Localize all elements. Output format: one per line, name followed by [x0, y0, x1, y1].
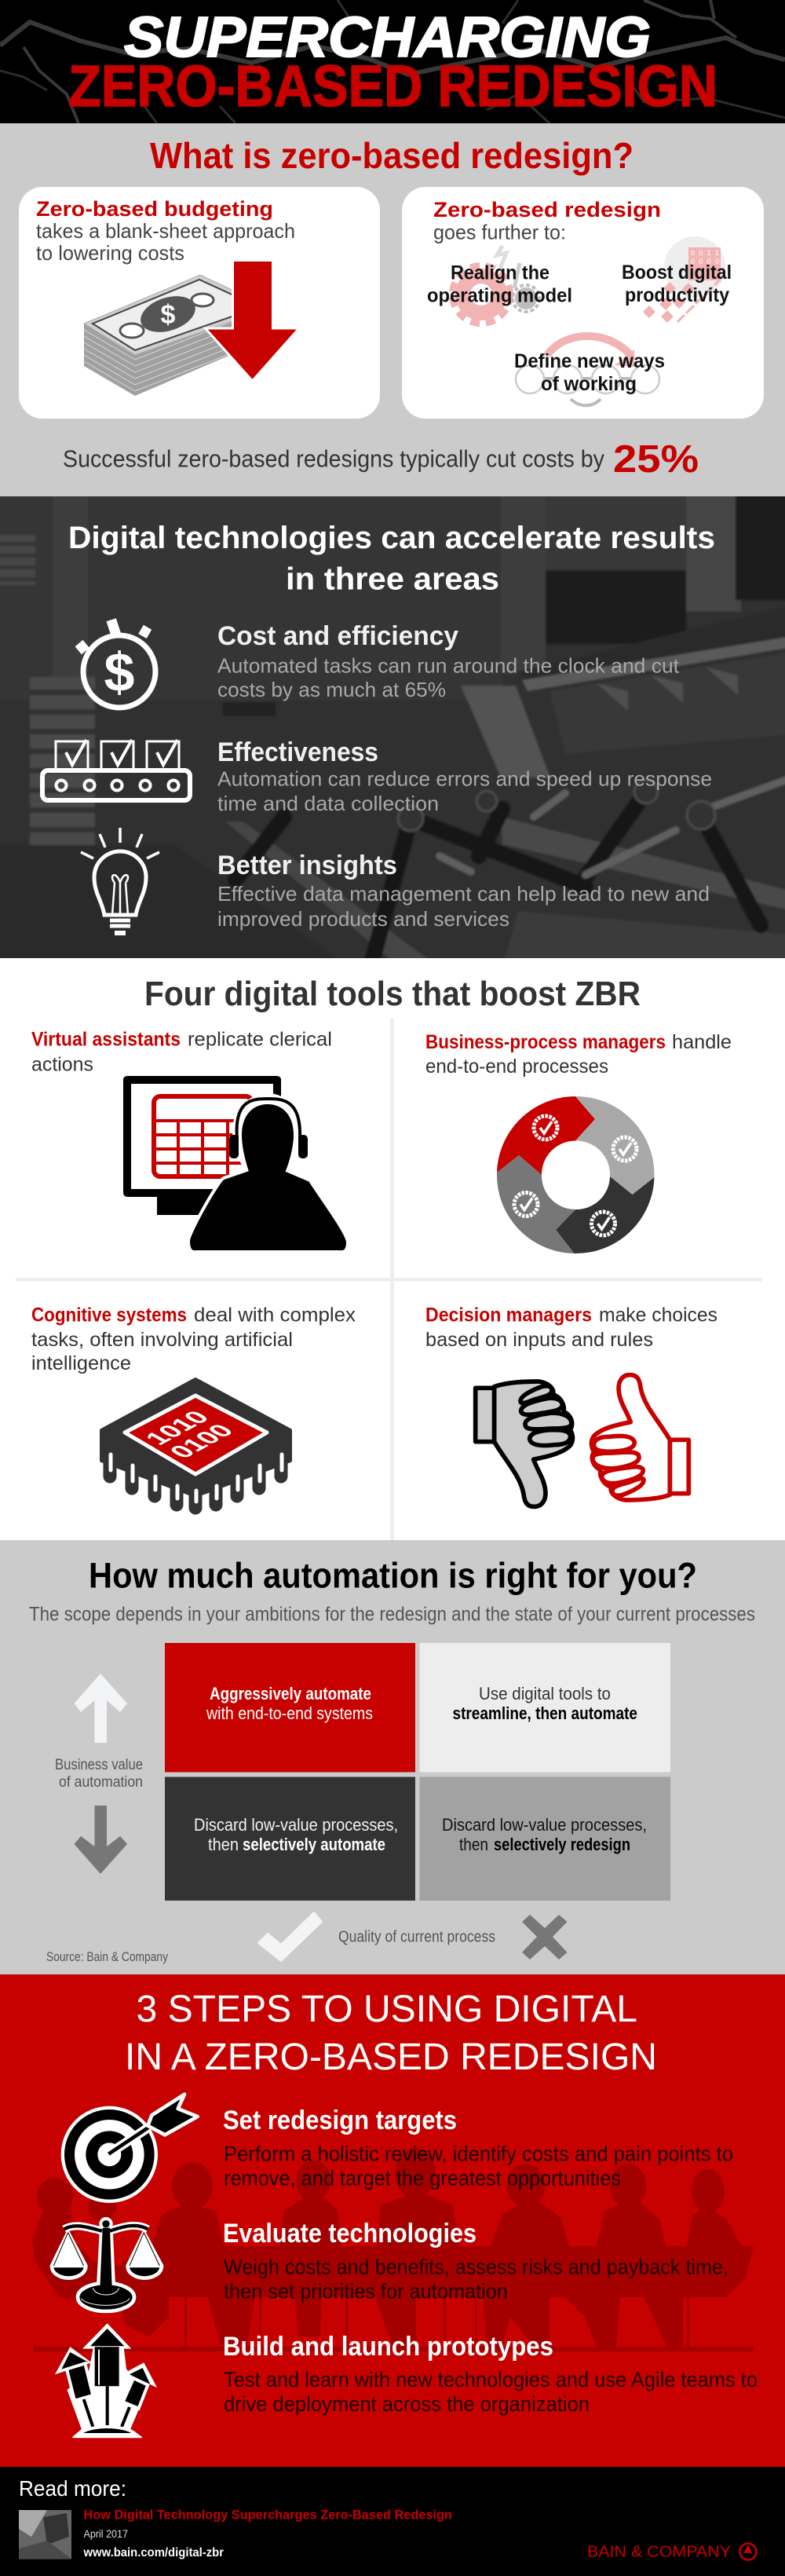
text: evaluate technologies: [223, 2219, 728, 2303]
panel: what is zero-based redesign: [0, 123, 785, 496]
text: effectiveness: Effectiveness: [217, 737, 378, 767]
matrix cell: selectively redesign: selectively redesign: [494, 1835, 630, 1854]
silhouettes of team at table: [32, 2148, 754, 2351]
icon: pale digital head: 0 0 1 1: [691, 249, 719, 257]
card: zero-based redesign: Zero-based redesign: [433, 198, 661, 221]
matrix cell: selectively automate: then: [208, 1835, 239, 1854]
text: set redesign targets: Set redesign targets: [223, 2106, 457, 2135]
text: virtual assistants: [31, 1029, 332, 1076]
table and seated bodies: [149, 2195, 754, 2297]
label: read more: Read more:: [19, 2476, 126, 2501]
text: cognitive systems: [31, 1304, 356, 1374]
text: effectiveness: Automation can reduce errors and speed up response: [217, 767, 712, 790]
text: cost and efficiency: [217, 621, 680, 701]
heading: digital technologies: in three areas: [286, 562, 499, 597]
icon: computer chip: 1010: [139, 1407, 216, 1449]
matrix cell: selectively automate: selectively automate: [243, 1835, 385, 1854]
label: define new ways of working: of working: [541, 373, 637, 395]
icon: process cycle donut: [497, 1096, 655, 1253]
text: business-process managers: end-to-end processes: [425, 1056, 608, 1078]
text: cognitive systems: intelligence: [31, 1352, 131, 1374]
text: business-process managers: handle: [672, 1031, 732, 1053]
text: cognitive systems: tasks, often involving artificial: [31, 1329, 293, 1351]
left seated woman: [32, 2211, 149, 2301]
label: realign the operating model: Realign the: [451, 262, 550, 284]
icon: light bulb: [81, 828, 159, 933]
matrix cell: selectively redesign: then: [459, 1835, 488, 1854]
red table: [154, 1096, 252, 1176]
heading: four digital tools: Four digital tools that boost ZBR: [144, 975, 641, 1013]
text: build and launch prototypes: Test and learn with new technologies and use Agile teams to: [224, 2368, 758, 2391]
text: virtual assistants: Virtual assistants: [31, 1029, 181, 1051]
title: [68, 6, 717, 119]
text: cost and efficiency: costs by as much at 65%: [217, 678, 446, 701]
icon: virtual assistant at monitor: [123, 1076, 348, 1252]
icon: thumbs down: [476, 1381, 572, 1506]
label: realign the operating model: operating model: [427, 284, 572, 306]
label: business value of automation: [55, 1757, 143, 1791]
callout: 25 percent: [63, 438, 699, 481]
text: build and launch prototypes: [223, 2332, 758, 2416]
text: business-process managers: Business-process managers: [425, 1031, 666, 1053]
matrix cell: selectively redesign: Discard low-value processes,: [442, 1815, 647, 1835]
text: evaluate technologies: Evaluate technologies: [223, 2219, 476, 2249]
text: build and launch prototypes: Build and launch prototypes: [223, 2332, 553, 2362]
text: better insights: improved products and services: [217, 907, 509, 931]
heading: digital technologies: Digital technologies can accelerate results: [68, 521, 715, 555]
text: decision managers: based on inputs and rules: [425, 1329, 653, 1351]
text: evaluate technologies: Weigh costs and benefits, assess risks and payback time,: [224, 2256, 728, 2279]
title: ZERO-BASED REDESIGN: [68, 53, 717, 119]
label: business value of automation: Business value: [55, 1757, 143, 1773]
icon: pale digital head: 0 0 0 0: [691, 258, 719, 265]
matrix cell: selectively automate: Discard low-value processes,: [194, 1815, 398, 1835]
icon: check mark: [258, 1912, 322, 1961]
text: set redesign targets: Perform a holistic review, identify costs and pain points to: [224, 2142, 733, 2166]
icon: stopwatch with dollar: $: [104, 642, 134, 703]
text: virtual assistants: actions: [31, 1054, 93, 1076]
panel: four digital tools: [0, 958, 785, 1540]
text: virtual assistants: replicate clerical: [188, 1029, 332, 1051]
label: define new ways of working: [514, 350, 665, 395]
label: business value of automation: of automation: [59, 1774, 143, 1791]
icon: rockets: [55, 2323, 157, 2437]
text: build and launch prototypes: drive deployment across the organization: [224, 2392, 590, 2416]
card: zero-based budgeting: to lowering costs: [36, 241, 184, 265]
matrix cell: selectively automate: [165, 1776, 415, 1901]
label: realign the operating model: [427, 262, 572, 306]
text: business-process managers: [425, 1031, 732, 1078]
report thumbnail: [19, 2510, 71, 2559]
icon: computer chip: 0100: [163, 1421, 240, 1462]
icon: thumbs up: [591, 1375, 688, 1500]
icon: x mark: [522, 1915, 567, 1959]
label: define new ways of working: Define new ways: [514, 350, 665, 372]
link: url: www.bain.com/digital-zbr: [83, 2546, 224, 2560]
icon: stack of money: [84, 275, 271, 396]
arrow: down: [74, 1806, 127, 1874]
text: better insights: [217, 851, 710, 931]
icon: down arrow: [206, 261, 299, 381]
matrix cell: selectively redesign: [419, 1776, 670, 1901]
matrix cell: streamline then automate: Use digital tools to: [479, 1684, 611, 1703]
title: SUPERCHARGING: [124, 6, 651, 69]
text: cognitive systems: Cognitive systems: [31, 1304, 187, 1326]
icon: conveyor belt with checkboxes: [42, 740, 190, 800]
icon: computer chip: [101, 1379, 290, 1508]
icon: pale gears: [452, 246, 539, 324]
card: zero-based budgeting: takes a blank-sheet approach: [36, 219, 295, 243]
label: boost digital productivity: Boost digital: [622, 262, 732, 284]
icon: target with arrow: [61, 2095, 198, 2203]
date: April 2017: [83, 2527, 128, 2540]
text: evaluate technologies: then set priorities for automation: [224, 2279, 508, 2303]
panel: how much automation: [0, 1540, 785, 1974]
callout: 25 percent: 25%: [613, 438, 699, 481]
label: boost digital productivity: productivity: [625, 284, 729, 306]
matrix cell: streamline then automate: streamline, then automate: [452, 1703, 637, 1723]
legs: [118, 2297, 169, 2336]
text: cognitive systems: deal with complex: [194, 1304, 356, 1326]
text: decision managers: make choices: [599, 1304, 717, 1326]
heading: what is zero-based redesign: What is zero-based redesign?: [150, 135, 633, 176]
text: set redesign targets: [223, 2106, 733, 2190]
icon: stopwatch with dollar: [75, 618, 155, 708]
link: report title: How Digital Technology Supercharges Zero-Based Redesign: [83, 2507, 452, 2523]
card: zero-based redesign: goes further to:: [433, 220, 566, 243]
icon: scales: [52, 2219, 162, 2311]
arrow: up: [74, 1674, 127, 1743]
background photo of robotic factory: [0, 488, 785, 968]
panel: footer read more: [0, 2467, 785, 2576]
icon: pale process wheel: [516, 336, 659, 405]
heading: 3 steps: [125, 1989, 657, 2078]
callout: 25 percent: Successful zero-based redesigns typically cut costs by: [63, 445, 604, 473]
card: zero-based budgeting: [19, 187, 380, 419]
text: decision managers: Decision managers: [425, 1304, 592, 1326]
matrix cell: aggressively automate: [165, 1643, 415, 1772]
text: effectiveness: [217, 737, 712, 815]
heading: 3 steps: 3 STEPS TO USING DIGITAL: [137, 1989, 637, 2030]
card: zero-based budgeting: Zero-based budgeting: [36, 197, 273, 221]
panel: digital technologies: [0, 488, 785, 968]
person with headset: [188, 1093, 348, 1252]
text: better insights: Better insights: [217, 851, 397, 880]
heading: how much automation: How much automation is right for you?: [89, 1555, 697, 1596]
icon: stack of money: $: [161, 300, 176, 330]
text: cost and efficiency: Cost and efficiency: [217, 621, 458, 651]
text: set redesign targets: remove, and target the greatest opportunities: [224, 2166, 621, 2190]
label: boost digital productivity: [622, 262, 732, 306]
matrix cell: aggressively automate: with end-to-end systems: [206, 1703, 373, 1723]
matrix cell: streamline then automate: [419, 1643, 670, 1772]
card: zero-based redesign: [402, 187, 764, 419]
text: effectiveness: time and data collection: [217, 792, 439, 815]
heading: 3 steps: IN A ZERO-BASED REDESIGN: [125, 2036, 657, 2078]
matrix cell: aggressively automate: Aggressively automate: [210, 1684, 371, 1703]
label: quality of current process: Quality of current process: [338, 1929, 495, 1946]
icon: pale digital head: [643, 236, 725, 323]
heading: digital technologies: [68, 521, 715, 597]
header banner: [0, 0, 785, 123]
text: cost and efficiency: Automated tasks can run around the clock and cut: [217, 653, 680, 677]
panel: 3 steps: [0, 1974, 785, 2467]
source: Source: Bain & Company: [46, 1949, 168, 1964]
text: decision managers: [425, 1304, 717, 1351]
logo: bain and company: BAIN & COMPANY: [587, 2543, 731, 2560]
text: better insights: Effective data management can help lead to new and: [217, 882, 710, 906]
